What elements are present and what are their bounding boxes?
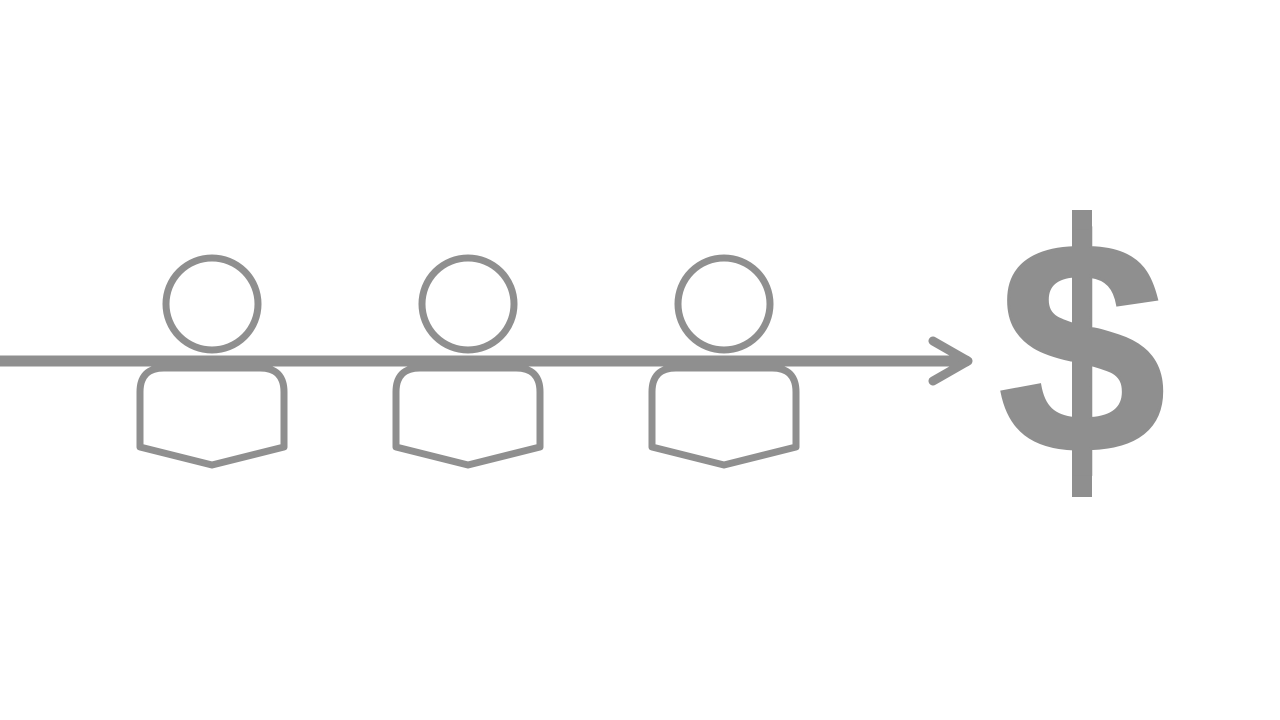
person 1 bbox=[140, 258, 284, 465]
person 3 bbox=[652, 258, 796, 465]
arrow bbox=[0, 341, 968, 381]
dollar sign: $ bbox=[998, 179, 1166, 516]
person 2 bbox=[396, 258, 540, 465]
